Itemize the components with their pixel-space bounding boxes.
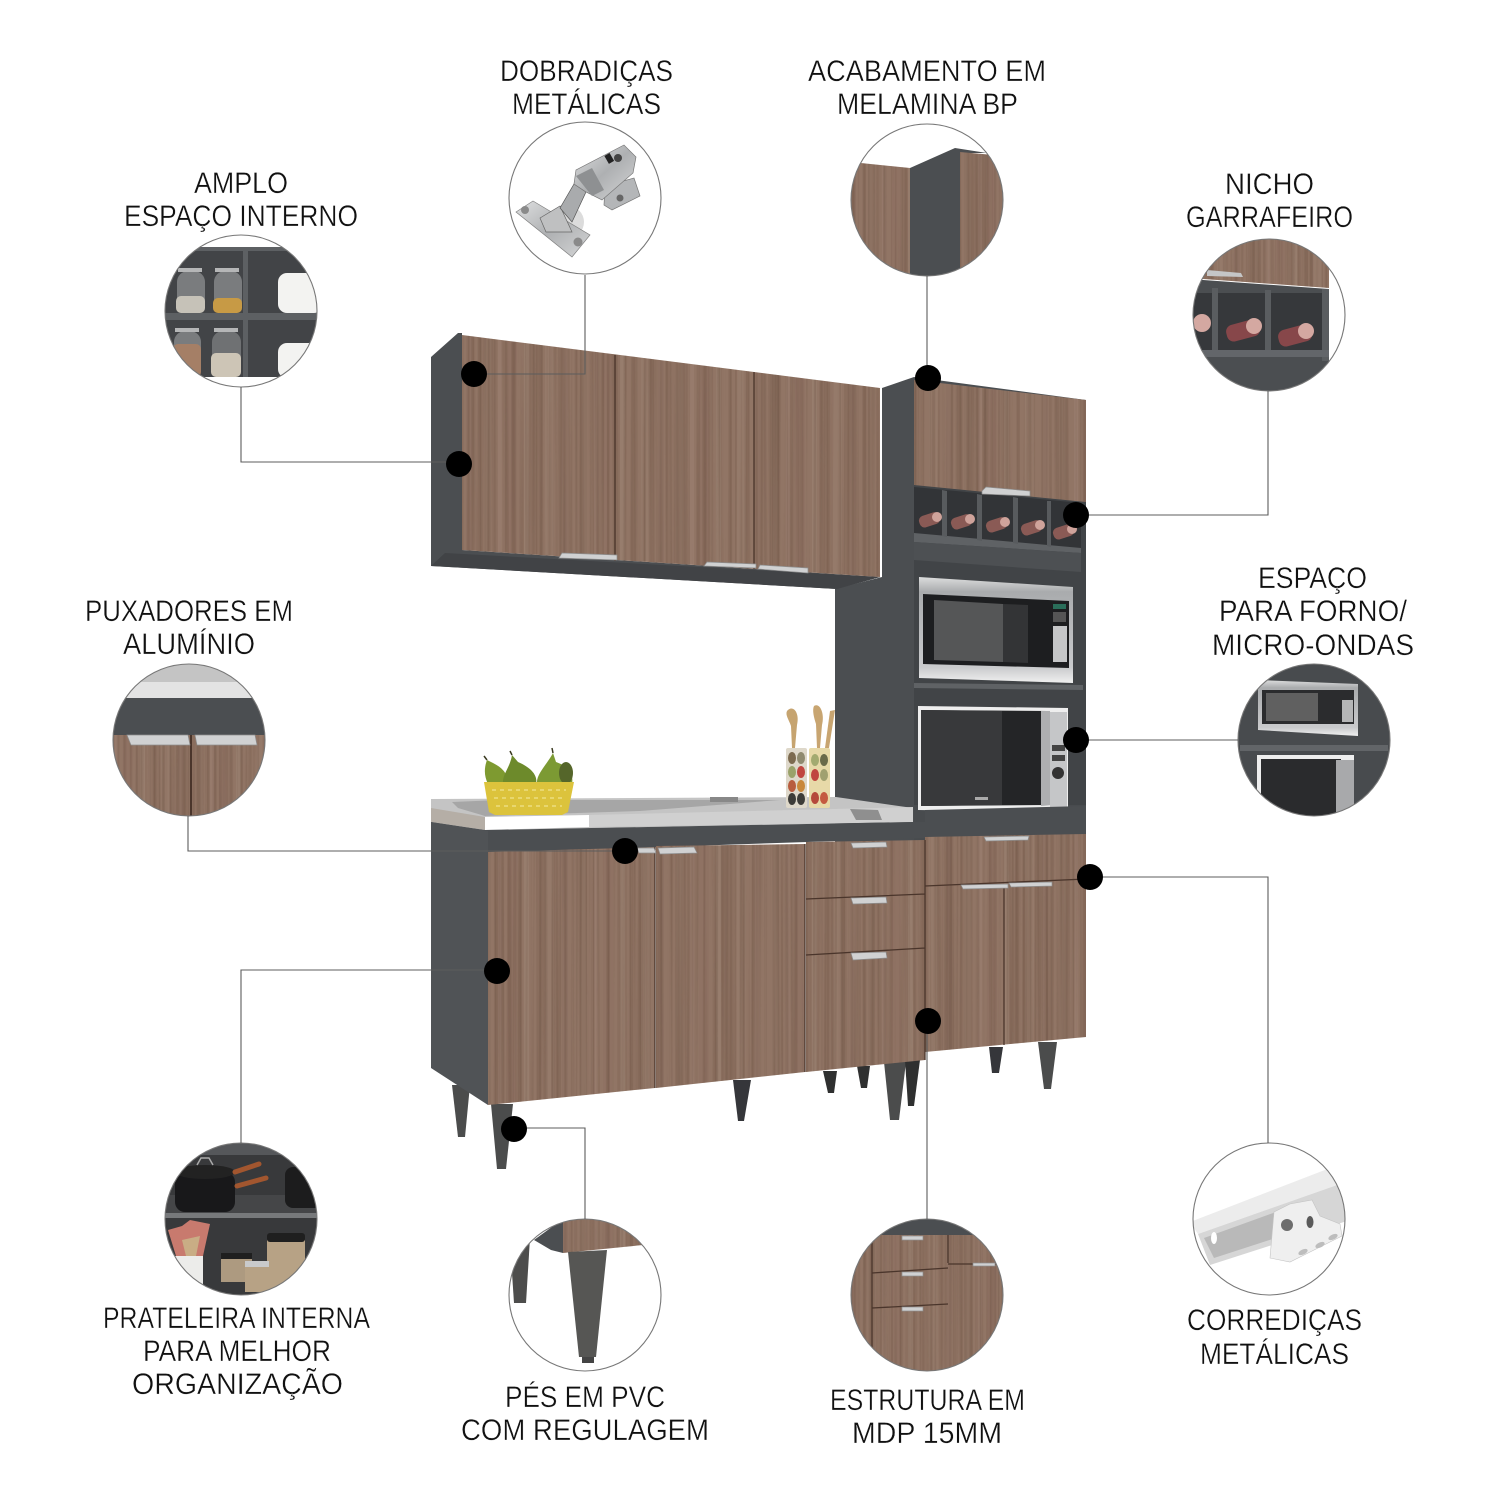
base handles <box>637 836 1052 960</box>
heading <box>461 1381 709 1447</box>
leader line <box>188 816 625 851</box>
inset photo: appliance bays <box>1236 662 1392 820</box>
heading: ESTRUTURA EM <box>830 1384 1025 1417</box>
heading: METÁLICAS <box>1200 1338 1349 1371</box>
inset photo: drawer slide <box>1190 1168 1350 1265</box>
leader line <box>926 1021 928 1219</box>
callout: puxadores em alumínio <box>85 595 638 864</box>
upper door on tower <box>914 380 1086 502</box>
marker <box>446 451 472 477</box>
heading: MDP 15MM <box>852 1417 1002 1450</box>
inset ring <box>165 235 317 387</box>
kitchen cabinet illustration <box>431 333 1086 1169</box>
heading <box>85 595 293 661</box>
heading: PARA MELHOR <box>143 1335 331 1368</box>
handles <box>559 553 808 573</box>
inset photo: hinge <box>516 145 640 257</box>
inset photo: shelf with pots <box>163 1141 323 1297</box>
heading: GARRAFEIRO <box>1186 201 1353 234</box>
callout: espaço para forno/micro-ondas <box>1063 562 1414 820</box>
marker <box>501 1116 527 1142</box>
heading: PUXADORES EM <box>85 595 293 628</box>
inset photo: drawer fronts <box>850 1218 1005 1374</box>
inset ring <box>1193 1143 1345 1295</box>
inset photo: corner finish <box>851 148 1004 280</box>
callout: amplo espaço interno <box>124 167 472 477</box>
heading: ESPAÇO INTERNO <box>124 200 358 233</box>
heading <box>1212 562 1414 662</box>
heading: METÁLICAS <box>512 88 661 121</box>
marker <box>484 958 510 984</box>
inset ring <box>509 122 661 274</box>
wall cabinet <box>431 333 880 589</box>
wine niche <box>914 487 1081 572</box>
inset photo: adjustable foot <box>510 1217 650 1363</box>
heading: DOBRADIÇAS <box>500 55 673 88</box>
leader line <box>514 1128 585 1219</box>
callout: acabamento em melamina bp <box>808 55 1046 391</box>
fruit bowl <box>484 748 574 815</box>
shelf between appliances <box>914 683 1083 690</box>
legs <box>452 1042 1057 1169</box>
callout: prateleira interna <box>103 958 510 1401</box>
heading: NICHO <box>1225 168 1314 201</box>
marker <box>1063 502 1089 528</box>
leader line <box>1076 391 1268 515</box>
inset ring <box>851 1219 1003 1371</box>
heading: AMPLO <box>194 167 288 200</box>
leader line <box>1076 739 1238 741</box>
inset photo: bottle niche <box>1190 236 1329 395</box>
inset ring <box>1193 239 1345 391</box>
marker <box>915 1008 941 1034</box>
callout: dobradiças metálicas <box>461 55 673 387</box>
heading: PARA FORNO/ <box>1219 595 1408 628</box>
heading <box>500 55 673 121</box>
base cabinets <box>431 806 1086 1105</box>
marker <box>461 361 487 387</box>
inset photo: aluminium handles <box>110 662 270 820</box>
microwave upper <box>919 577 1073 683</box>
heading: PÉS EM PVC <box>505 1381 665 1414</box>
inset ring <box>1238 664 1390 816</box>
heading: ESPAÇO <box>1258 562 1367 595</box>
heading: ALUMÍNIO <box>123 628 255 661</box>
callout: estrutura em mdp 15mm <box>830 1008 1025 1450</box>
inset ring <box>851 124 1003 276</box>
heading <box>808 55 1046 121</box>
marker <box>1063 727 1089 753</box>
inset ring <box>113 664 265 816</box>
heading: CORREDIÇAS <box>1187 1304 1362 1337</box>
callout: pés em pvc <box>461 1116 709 1447</box>
leader line <box>926 276 928 378</box>
microwave lower <box>918 706 1068 812</box>
leader line <box>241 970 497 1143</box>
heading <box>1186 168 1353 234</box>
callout: nicho garrafeiro <box>1063 168 1353 528</box>
marker <box>612 838 638 864</box>
heading: MELAMINA BP <box>837 88 1018 121</box>
inset ring <box>509 1219 661 1371</box>
heading <box>124 167 358 233</box>
inset ring <box>165 1143 317 1295</box>
heading: COM REGULAGEM <box>461 1414 709 1447</box>
heading: ACABAMENTO EM <box>808 55 1046 88</box>
heading <box>103 1302 370 1401</box>
tower unit <box>835 377 1086 850</box>
callout: corrediças metálicas <box>1077 864 1362 1371</box>
heading: ORGANIZAÇÃO <box>132 1367 343 1401</box>
utensil holders <box>786 705 835 808</box>
leader line <box>1090 877 1268 1143</box>
marker <box>915 365 941 391</box>
inset photo: shelves with jars <box>166 247 316 377</box>
heading: MICRO-ONDAS <box>1212 629 1414 662</box>
marker <box>1077 864 1103 890</box>
heading <box>1187 1304 1362 1371</box>
countertop <box>431 797 913 830</box>
heading: PRATELEIRA INTERNA <box>103 1302 370 1335</box>
leader line <box>474 275 585 374</box>
heading <box>830 1384 1025 1450</box>
leader line <box>241 387 459 462</box>
